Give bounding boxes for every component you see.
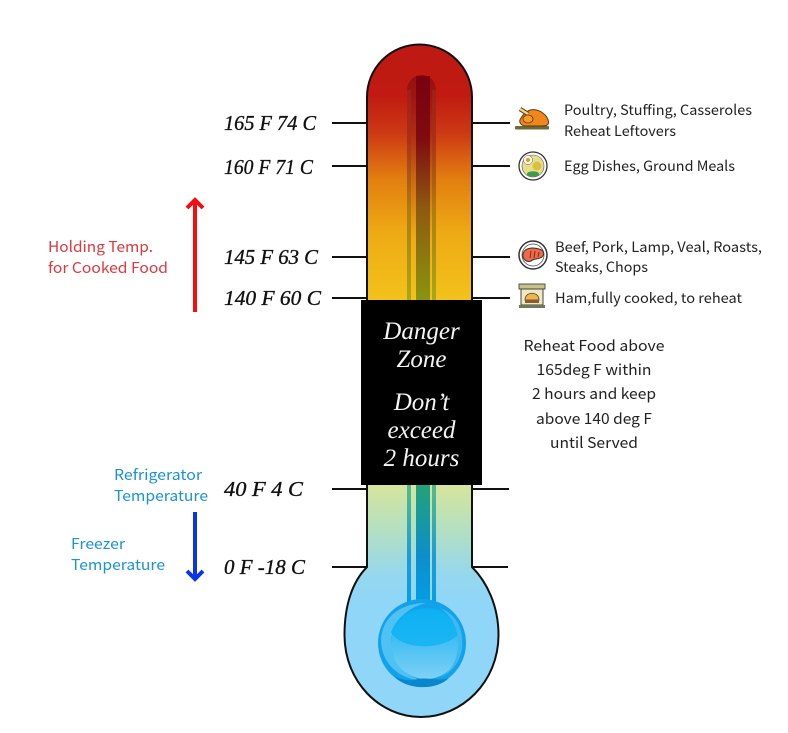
holding temp label: for Cooked Food	[48, 257, 168, 278]
danger zone box: Don’t	[393, 389, 450, 416]
freezer label: Freezer	[71, 533, 125, 554]
inner tube	[407, 75, 436, 610]
temperature labels: 140 F 60 C	[224, 286, 322, 310]
tick marks	[332, 123, 510, 567]
thermometer bulb	[378, 599, 466, 687]
temperature labels: 165 F 74 C	[224, 111, 317, 135]
reheat instructions: Reheat Food above	[524, 335, 664, 356]
food labels	[555, 100, 762, 308]
food labels: Reheat Leftovers	[564, 121, 676, 141]
danger zone box: exceed	[388, 417, 456, 444]
reheat instructions: above 140 deg F	[536, 408, 652, 429]
holding temp label: Holding Temp.	[48, 236, 153, 257]
danger zone box: 2 hours	[384, 445, 459, 472]
icon: egg dish plate	[519, 152, 547, 180]
icon: steak plate	[519, 241, 547, 269]
icon: oven	[519, 284, 545, 308]
temperature labels: 160 F 71 C	[224, 155, 314, 179]
reheat instructions: 165deg F within	[536, 359, 652, 380]
thermometer	[344, 45, 498, 717]
temperature labels	[224, 111, 322, 579]
reheat instructions: until Served	[550, 432, 638, 453]
temperature labels: 40 F 4 C	[224, 477, 304, 501]
food labels: Egg Dishes, Ground Meals	[564, 156, 735, 176]
danger zone box: Zone	[396, 346, 446, 373]
refrigerator label	[114, 464, 208, 506]
food labels: Beef, Pork, Lamp, Veal, Roasts,	[555, 237, 762, 257]
holding temp label	[48, 236, 168, 278]
reheat instructions	[524, 335, 664, 453]
freezer label: Temperature	[71, 554, 165, 575]
thermometer body	[344, 45, 498, 717]
danger zone box	[361, 300, 482, 485]
food labels: Poultry, Stuffing, Casseroles	[564, 100, 752, 120]
food labels: Steaks, Chops	[555, 257, 648, 277]
reheat instructions: 2 hours and keep	[532, 383, 656, 404]
danger zone text: Danger	[382, 318, 460, 345]
temperature labels: 0 F -18 C	[224, 555, 306, 579]
arrow: up red	[187, 200, 203, 312]
icon: roast chicken	[515, 109, 549, 130]
refrigerator label: Refrigerator	[114, 464, 202, 485]
food labels: Ham,fully cooked, to reheat	[555, 288, 743, 308]
temperature labels: 145 F 63 C	[224, 245, 319, 269]
arrow: down blue	[187, 512, 203, 579]
refrigerator label: Temperature	[114, 485, 208, 506]
freezer label	[71, 533, 165, 575]
